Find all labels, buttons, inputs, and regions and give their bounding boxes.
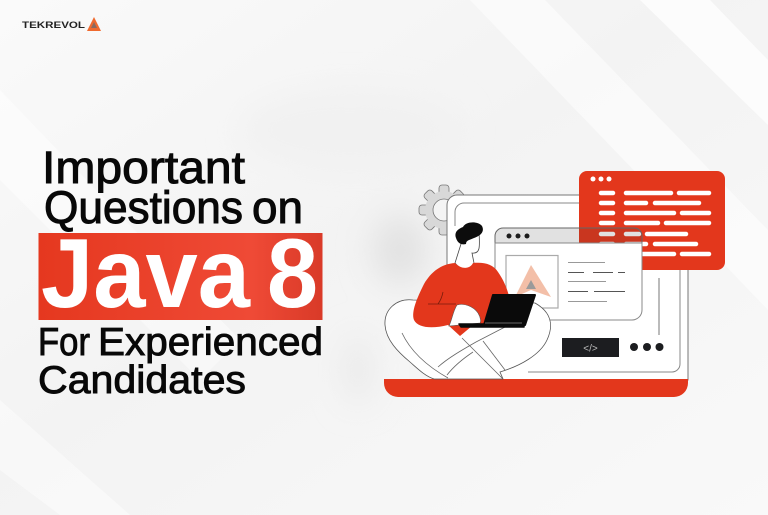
heading line: For Experienced: For	[38, 321, 90, 364]
code button: </>	[583, 344, 598, 354]
browser window	[495, 228, 642, 320]
logo wordmark: TEKREVOL	[22, 20, 85, 31]
hand	[449, 304, 481, 326]
code button	[562, 338, 619, 357]
red highlight band: Java 8: 8	[267, 218, 318, 328]
monitor	[447, 195, 688, 380]
heading line: Candidates: Candidates	[38, 359, 246, 402]
laptop	[459, 295, 535, 327]
window dots	[506, 234, 530, 238]
headline	[38, 142, 323, 402]
three dots	[630, 343, 664, 351]
red highlight band: Java 8: Java	[41, 218, 251, 328]
heading line: Important: Important	[42, 142, 246, 193]
image frame with logo	[506, 256, 558, 308]
sweater	[413, 263, 509, 336]
code panel	[579, 171, 725, 270]
hair	[455, 222, 483, 244]
logo	[22, 17, 101, 31]
illustration	[384, 171, 725, 397]
heading line: Questions on: on	[252, 182, 303, 233]
base bar	[384, 379, 688, 397]
legs	[385, 300, 551, 379]
text lines	[568, 262, 625, 302]
heading line: Questions on: Questions	[44, 182, 243, 233]
panel dots	[590, 176, 612, 182]
heading line: For Experienced: Experienced	[98, 321, 323, 364]
code lines	[601, 193, 709, 254]
icon: gear	[419, 185, 469, 235]
person	[385, 222, 551, 379]
logo triangle icon	[87, 17, 101, 31]
neck and face	[455, 232, 479, 269]
